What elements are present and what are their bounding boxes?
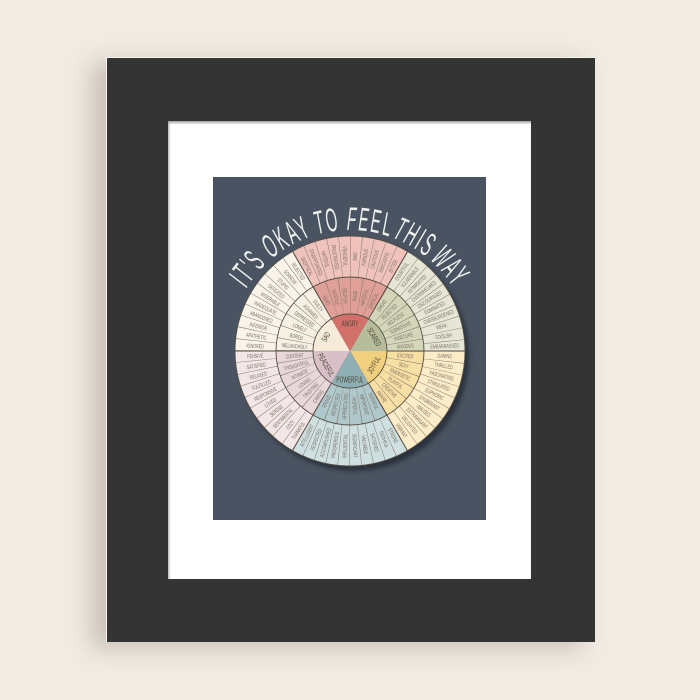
outer ring labels: joyful: FASCINATING — [429, 370, 454, 383]
middle ring labels: HATEFUL — [360, 288, 371, 307]
title: THIS — [394, 217, 436, 255]
middle ring labels: ENERGETIC — [389, 367, 412, 383]
outer ring labels: sad: ABANDONED — [249, 310, 274, 325]
middle ring labels: HURT — [320, 295, 331, 307]
middle ring labels: BORED — [289, 332, 304, 343]
outer ring labels: peaceful: SATISFIED — [246, 362, 267, 372]
outer ring labels: scared: OVERWHELMED — [410, 280, 438, 304]
outer ring labels: scared: INTIMIDATED — [407, 273, 429, 295]
middle ring labels: AWARE — [374, 389, 388, 405]
core emotion labels: SCARED — [365, 327, 382, 348]
outer ring labels: powerful: SIGNIFICANT — [350, 434, 358, 458]
outer ring labels: angry: BITTER — [388, 259, 400, 274]
sector: powerful fills — [264, 351, 408, 500]
outer ring labels: angry: CAUTIOUS — [369, 249, 381, 270]
outer ring labels: sad: DEFEATED — [266, 283, 286, 301]
outer ring labels: angry: SARCASTIC — [378, 251, 392, 274]
outer ring labels: angry: VENGEFUL — [340, 246, 348, 267]
middle ring labels: THOUGHTFUL — [283, 359, 310, 373]
sector: angry fills — [292, 202, 436, 351]
title: FEEL — [347, 208, 390, 236]
outer ring labels: scared: DOUBTFUL — [394, 261, 411, 282]
middle ring labels: EXCITED — [397, 352, 414, 361]
outer ring labels: scared: WEAK — [436, 322, 449, 332]
outer ring labels: powerful: FAITHFUL — [377, 430, 390, 450]
outer ring labels: sad: SORROW — [281, 269, 298, 287]
middle ring labels: REJECTED — [380, 303, 400, 322]
outer ring labels: sad: STUPID — [275, 277, 290, 292]
middle ring labels: RAGE — [352, 290, 360, 301]
core emotion labels: ANGRY — [342, 320, 359, 329]
middle ring labels: PROUD — [321, 394, 334, 409]
middle ring labels: GUILTY — [311, 299, 325, 314]
outer ring labels: joyful: STIMULATED — [426, 378, 451, 393]
middle ring labels: LONELY — [291, 322, 308, 335]
outer ring labels: angry — [298, 244, 400, 278]
outer ring labels: sad: IGNORED — [246, 343, 264, 351]
title — [228, 208, 470, 288]
middle ring labels: FAITHFUL — [366, 392, 380, 411]
outer ring labels: peaceful: PENSIVE — [247, 353, 264, 361]
outer ring labels: powerful — [299, 424, 399, 459]
picture frame — [106, 57, 595, 642]
title: IT'S — [228, 251, 264, 288]
outer ring labels: scared: VULNERABLE — [400, 265, 421, 290]
outer ring labels: scared: FOOLISH — [435, 332, 453, 342]
title: TO — [313, 208, 337, 234]
middle ring labels: SUBMISSIVE — [389, 320, 413, 336]
outer ring labels: peaceful: RELAXED — [249, 371, 268, 382]
sector: scared fills — [350, 251, 494, 401]
sector: sad fills — [235, 251, 350, 351]
middle ring labels: CRITICAL — [367, 292, 381, 310]
middle ring labels: TRUSTING — [302, 381, 321, 400]
middle ring labels: PLAYFUL — [386, 376, 404, 391]
middle ring labels: RESPECTED — [330, 392, 343, 417]
middle ring labels: MELANCHOLY — [282, 342, 308, 352]
outer ring labels: scared: OVERBURDENED — [423, 309, 455, 327]
middle ring labels: CARING — [312, 389, 326, 405]
outer ring labels: angry: SKEPTICAL — [298, 256, 314, 278]
sector: peaceful fills — [206, 301, 350, 451]
middle ring labels: HOPEFUL — [350, 397, 358, 416]
title: WAY — [432, 244, 470, 284]
outer ring labels: powerful: INFLUENTIAL — [342, 433, 350, 458]
outer ring labels: powerful: ACCOMPLISHED — [319, 427, 334, 458]
outer ring labels: sad — [245, 262, 306, 351]
outer ring labels: angry: FRUSTRATED — [329, 244, 340, 271]
outer ring labels: sad: INADEQUATE — [253, 300, 278, 318]
middle ring labels: HELPLESS — [386, 311, 406, 328]
outer ring labels: joyful — [394, 353, 454, 440]
middle ring labels: SELFISH — [340, 288, 349, 304]
outer ring labels: joyful: EUPHORIC — [424, 387, 445, 403]
core emotion labels — [315, 320, 383, 385]
middle ring labels: DREAD — [376, 298, 389, 313]
outer ring labels: powerful: SATISFIED — [368, 433, 380, 453]
core emotion labels: POWERFUL — [336, 376, 364, 385]
core emotion labels: PEACEFUL — [315, 352, 336, 379]
outer ring labels: powerful: VALUABLE — [359, 435, 369, 455]
outer ring labels: powerful: PROSPEROUS — [330, 431, 342, 459]
sector: joyful fills — [350, 351, 465, 451]
middle ring labels: SEXY — [398, 361, 410, 371]
outer ring labels: peaceful: THANKFUL — [291, 421, 308, 441]
outer ring labels: powerful: STRONG — [386, 427, 399, 445]
outer ring labels: joyful: AMUSED — [415, 404, 432, 419]
outer ring labels: peaceful: RESPONSIVE — [253, 386, 279, 404]
outer ring labels: scared: DOMINATED — [423, 300, 447, 317]
outer ring labels: joyful: VIBRANT — [394, 422, 408, 440]
white mat — [168, 121, 531, 579]
middle ring labels: APPRECIATED — [341, 393, 351, 420]
core emotion labels: SAD — [320, 331, 333, 344]
middle ring labels: ASHAMED — [301, 303, 320, 322]
middle ring labels: CONTENT — [285, 352, 304, 361]
core emotion labels: JOYFUL — [366, 355, 383, 375]
middle ring labels: IMPORTANT — [357, 393, 370, 416]
outer ring labels: angry: HATEFUL — [319, 250, 330, 269]
navy art print — [213, 177, 486, 520]
outer ring labels: peaceful: COZY — [285, 419, 297, 432]
outer ring labels: peaceful: LOVED — [264, 397, 278, 410]
title: OKAY — [262, 216, 308, 256]
middle ring labels: INSECURE — [394, 331, 415, 343]
middle ring labels: LOVING — [297, 376, 313, 390]
outer ring labels: peaceful — [246, 353, 308, 441]
outer ring labels: sad: MISERABLE — [259, 291, 281, 309]
middle ring labels: DEPRESSED — [293, 310, 316, 330]
outer ring labels: joyful: EXTRAVAGANT — [404, 406, 429, 431]
outer ring labels: scared: EMBARRASSED — [430, 343, 460, 351]
outer ring labels: joyful: EXUBERANT — [418, 394, 441, 413]
feelings wheel — [206, 202, 494, 500]
outer ring labels: joyful: THRILLED — [434, 362, 453, 372]
outer ring labels: peaceful: SERENE — [269, 403, 285, 419]
outer ring labels: scared: DISCOURAGED — [416, 289, 444, 311]
outer ring labels: angry: FURIOUS — [361, 248, 371, 266]
outer ring labels: joyful: DARING — [437, 353, 452, 361]
outer ring labels: peaceful: FULFILLED — [251, 379, 273, 393]
outer ring labels: joyful: DELIGHTED — [400, 415, 419, 436]
outer ring labels: angry: DISAPPOINTED — [307, 248, 324, 277]
wheel drop shadow — [239, 241, 469, 471]
outer ring labels: powerful: INTELLIGENT — [299, 424, 316, 448]
middle ring labels: CREATIVE — [380, 382, 398, 400]
middle ring labels — [282, 288, 415, 420]
outer ring labels: peaceful: SENTIMENTAL — [272, 407, 295, 430]
outer ring labels: sad: INFERIOR — [249, 321, 268, 333]
outer ring labels: sad: REJECTED — [289, 262, 306, 282]
outer ring labels: powerful: RESPECTED — [309, 428, 324, 452]
middle ring labels: ANXIOUS — [397, 343, 415, 351]
outer ring labels: angry: MAD — [352, 252, 360, 261]
middle ring labels: INTIMATE — [291, 368, 310, 382]
outer ring labels: scared — [394, 261, 460, 351]
middle ring labels: HOSTILE — [329, 289, 341, 307]
outer ring labels: sad: APATHETIC — [245, 332, 267, 342]
